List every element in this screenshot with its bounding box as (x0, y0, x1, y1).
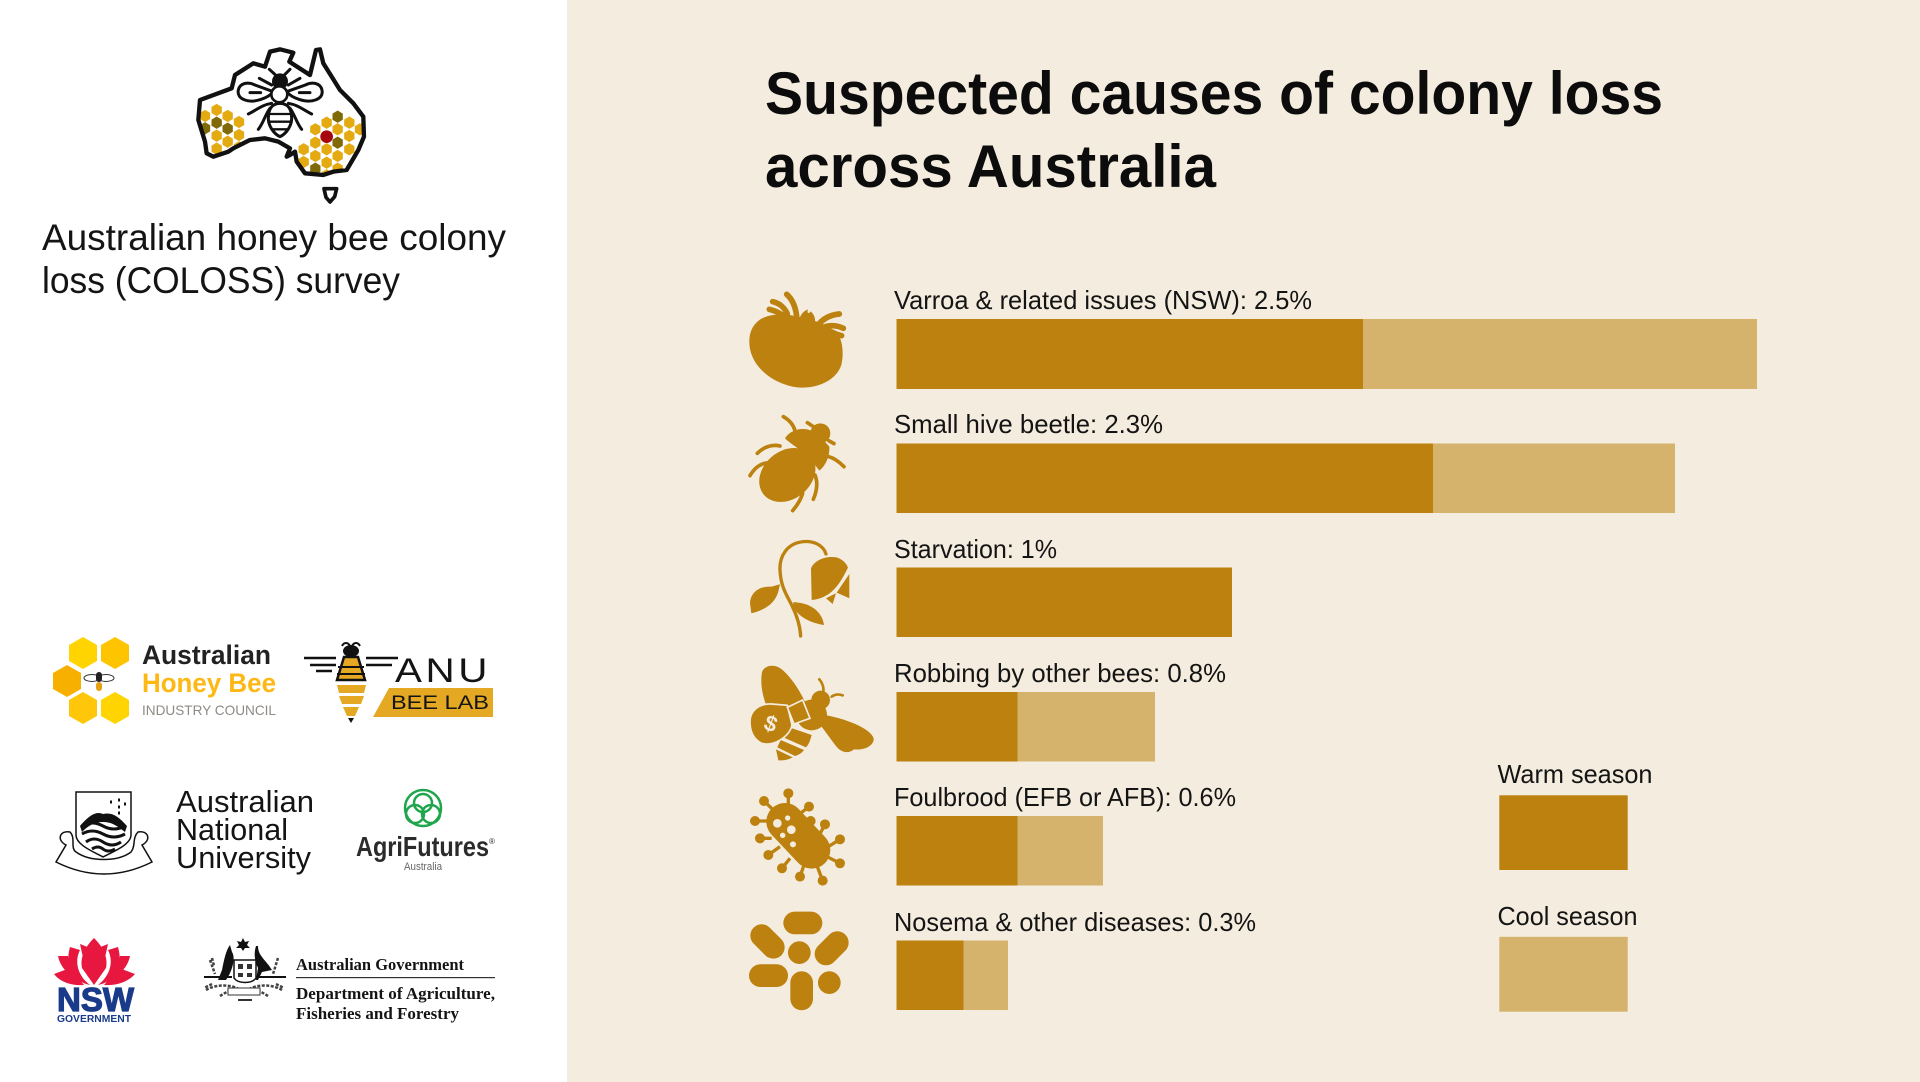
logo: NSW Government: NSW (57, 981, 135, 1018)
row: small hive beetle (894, 409, 1675, 513)
logo: AgriFutures Australia (356, 790, 495, 873)
text: survey name: loss (COLOSS) survey (42, 260, 400, 301)
icon: wilted flower (750, 541, 849, 636)
logo: Australian Government coat of arms and department: Australian Government (296, 955, 464, 974)
title: across Australia (765, 133, 1217, 200)
row: nosema (894, 907, 1256, 1010)
title: Suspected causes of colony loss (765, 60, 1663, 127)
logo: Australian Government coat of arms and department (204, 938, 495, 1023)
row: foulbrood: Foulbrood (EFB or AFB): 0.6% (894, 782, 1236, 812)
row: nosema: Nosema & other diseases: 0.3% (894, 907, 1256, 937)
logo: Australian National University: Australian (176, 784, 314, 819)
icon: bee carrying money bag: $ (761, 710, 781, 737)
panel: left sidebar (0, 0, 567, 1082)
logo: Australian Honey Bee Industry Council: Australian (142, 640, 271, 670)
logo: AgriFutures Australia: Australia (404, 861, 443, 873)
logo: Australian Honey Bee Industry Council (53, 637, 276, 724)
logo: NSW Government: GOVERNMENT (57, 1014, 131, 1025)
icon: nosema spores (749, 912, 841, 1010)
title (765, 60, 1663, 200)
logo: Australian Government coat of arms and department: Department of Agriculture, (296, 984, 495, 1003)
logo: NSW Government (54, 938, 135, 1025)
row: starvation (894, 534, 1232, 637)
logo: Australian National University: University (176, 840, 311, 875)
legend: seasons (1498, 759, 1652, 1012)
logo: AgriFutures Australia: ® (489, 837, 495, 846)
bar chart: suspected causes by season (894, 285, 1757, 1010)
icon: small hive beetle (748, 417, 844, 513)
logo: AgriFutures Australia: AgriFutures (356, 831, 489, 862)
row: varroa: Varroa & related issues (NSW): 2.5% (894, 285, 1312, 315)
logo: Australian National University: National (176, 812, 288, 847)
row: small hive beetle: Small hive beetle: 2.3% (894, 409, 1163, 439)
text: survey name: Australian honey bee colony (42, 217, 506, 258)
legend: seasons: Cool season (1498, 901, 1638, 931)
icon: varroa mite (749, 294, 843, 388)
row: robbing: Robbing by other bees: 0.8% (894, 658, 1226, 688)
logo: Australian Government coat of arms and department: Fisheries and Forestry (296, 1004, 459, 1023)
logo: Australian National University (56, 784, 314, 875)
logo: ANU Bee Lab: BEE LAB (391, 693, 489, 714)
row: starvation: Starvation: 1% (894, 534, 1057, 564)
icon: foulbrood bacterium (750, 788, 845, 886)
logo: ANU Bee Lab (304, 643, 493, 723)
icon: bee carrying money bag (750, 666, 874, 760)
logo: Australian Honey Bee Industry Council: Honey Bee (142, 668, 276, 698)
row: robbing (894, 658, 1226, 762)
row: varroa (894, 285, 1757, 389)
logo: ANU Bee Lab: ANU (395, 652, 491, 690)
panel: right background (567, 0, 1920, 1082)
row: foulbrood (894, 782, 1236, 886)
logo: Australian Honey Bee Industry Council: INDUSTRY COUNCIL (142, 702, 276, 718)
logo: Australia map with bee and honeycomb (198, 49, 365, 202)
text: survey name (42, 217, 506, 301)
legend: seasons: Warm season (1498, 759, 1652, 789)
